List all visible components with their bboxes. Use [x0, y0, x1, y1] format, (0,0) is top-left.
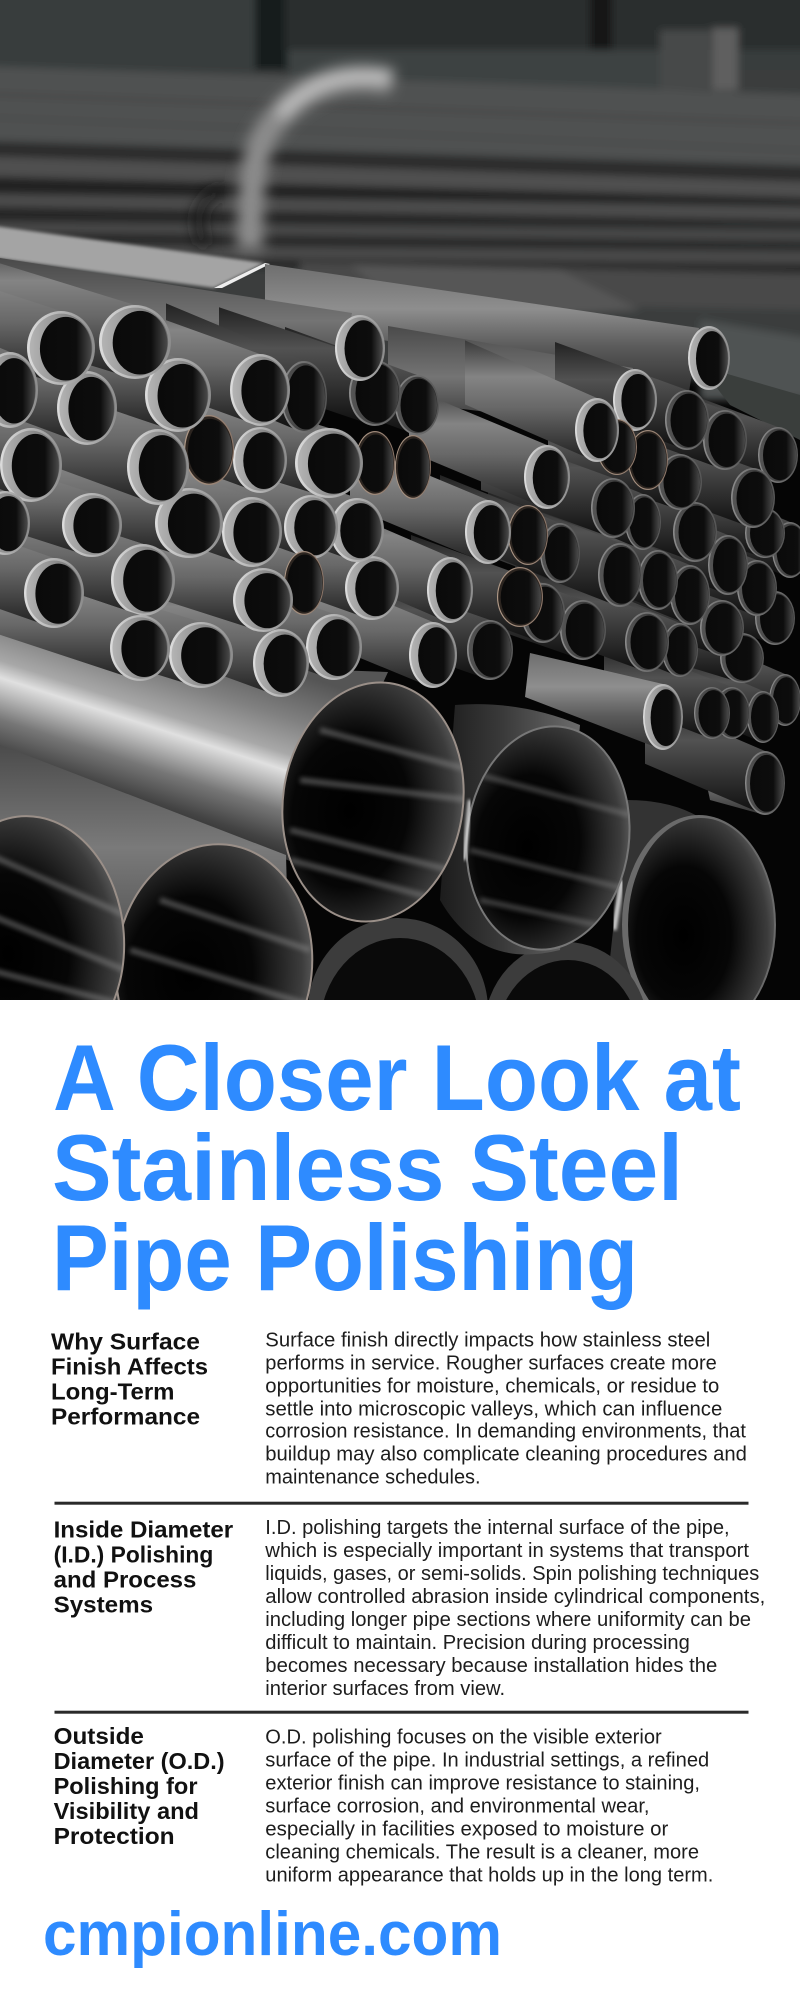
- body text: inside diameter: which is especially important in systems that transport: [264, 1540, 749, 1562]
- heading: why surface finish: Why Surface: [51, 1328, 200, 1354]
- large pipe: far right: [610, 800, 776, 1000]
- body text: why surface finish: corrosion resistance. In demanding environments, that: [265, 1421, 746, 1443]
- body text: outside diameter: exterior finish can improve resistance to staining,: [265, 1772, 700, 1794]
- heading: inside diameter: Inside Diameter: [54, 1516, 233, 1542]
- title: [52, 1025, 741, 1310]
- heading: inside diameter: [54, 1516, 233, 1617]
- large pipe: centre-right: [440, 704, 643, 960]
- body text: why surface finish: maintenance schedules.: [265, 1467, 481, 1489]
- long pipes at the top of the stack: [0, 226, 800, 440]
- heading: outside diameter: Outside: [54, 1723, 144, 1749]
- blurred warehouse background: [0, 0, 800, 400]
- heading: inside diameter: (I.D.) Polishing: [54, 1541, 213, 1567]
- body text: why surface finish: opportunities for moisture, chemicals, or residue to: [265, 1376, 719, 1398]
- heading: outside diameter: Diameter (O.D.): [54, 1748, 225, 1774]
- heading: outside diameter: [54, 1723, 225, 1849]
- website url: cmpionline.com: [43, 1900, 502, 1969]
- body text: why surface finish: settle into microscopic valleys, which can influence: [265, 1399, 722, 1421]
- title: A Closer Look at: [53, 1025, 741, 1130]
- photo: stacked stainless steel pipes: [0, 0, 800, 1000]
- strap around background bundle: [199, 76, 392, 250]
- large pipe body: main foreground, behind small pipes: [0, 628, 388, 865]
- body text: inside diameter: including longer pipe sections where uniformity can be: [265, 1609, 751, 1631]
- large pipe: foreground main end: [281, 682, 465, 922]
- body text: inside diameter: I.D. polishing targets the internal surface of the pipe,: [265, 1517, 730, 1539]
- small pipe ends: [0, 238, 800, 815]
- body text: inside diameter: allow controlled abrasion inside cylindrical components,: [265, 1586, 765, 1608]
- body text: why surface finish: [265, 1330, 747, 1489]
- heading: why surface finish: Long-Term: [51, 1378, 174, 1404]
- body text: why surface finish: Surface finish directly impacts how stainless steel: [265, 1330, 710, 1352]
- body text: why surface finish: buildup may also complicate cleaning procedures and: [265, 1444, 747, 1466]
- heading: inside diameter: Systems: [54, 1591, 153, 1617]
- heading: why surface finish: [51, 1328, 208, 1429]
- section: why surface finish matters: [51, 1328, 747, 1489]
- section: inside diameter polishing: [54, 1516, 765, 1700]
- body text: inside diameter: interior surfaces from view.: [265, 1678, 505, 1700]
- body text: outside diameter: surface corrosion, and environmental wear,: [265, 1795, 650, 1817]
- heading: outside diameter: Visibility and: [54, 1798, 199, 1824]
- large pipe: bottom centre-right: [489, 942, 643, 1000]
- heading: why surface finish: Finish Affects: [51, 1353, 208, 1379]
- title: Pipe Polishing: [52, 1205, 638, 1310]
- body text: inside diameter: becomes necessary because installation hides the: [265, 1655, 717, 1677]
- body text: inside diameter: difficult to maintain. Precision during processing: [265, 1632, 690, 1654]
- body text: outside diameter: surface of the pipe. In industrial settings, a refined: [265, 1749, 709, 1771]
- body text: inside diameter: liquids, gases, or semi-solids. Spin polishing techniques: [265, 1563, 759, 1585]
- heading: outside diameter: Polishing for: [54, 1773, 198, 1799]
- large pipe: foreground left body: [0, 747, 314, 1000]
- body text: outside diameter: uniform appearance that holds up in the long term.: [265, 1864, 713, 1886]
- body text: outside diameter: cleaning chemicals. The result is a cleaner, more: [265, 1841, 699, 1863]
- body text: outside diameter: O.D. polishing focuses on the visible exterior: [265, 1726, 662, 1748]
- title: Stainless Steel: [52, 1115, 683, 1220]
- section: outside diameter polishing: [54, 1723, 713, 1886]
- heading: outside diameter: Protection: [54, 1823, 175, 1849]
- heading: inside diameter: and Process: [54, 1566, 196, 1592]
- body text: inside diameter: [264, 1517, 765, 1700]
- body text: why surface finish: performs in service. Rougher surfaces create more: [265, 1353, 717, 1375]
- heading: why surface finish: Performance: [51, 1403, 200, 1429]
- large pipe: bottom centre: [308, 918, 488, 1000]
- body text: outside diameter: [265, 1726, 713, 1886]
- body text: outside diameter: especially in facilities exposed to moisture or: [265, 1818, 669, 1840]
